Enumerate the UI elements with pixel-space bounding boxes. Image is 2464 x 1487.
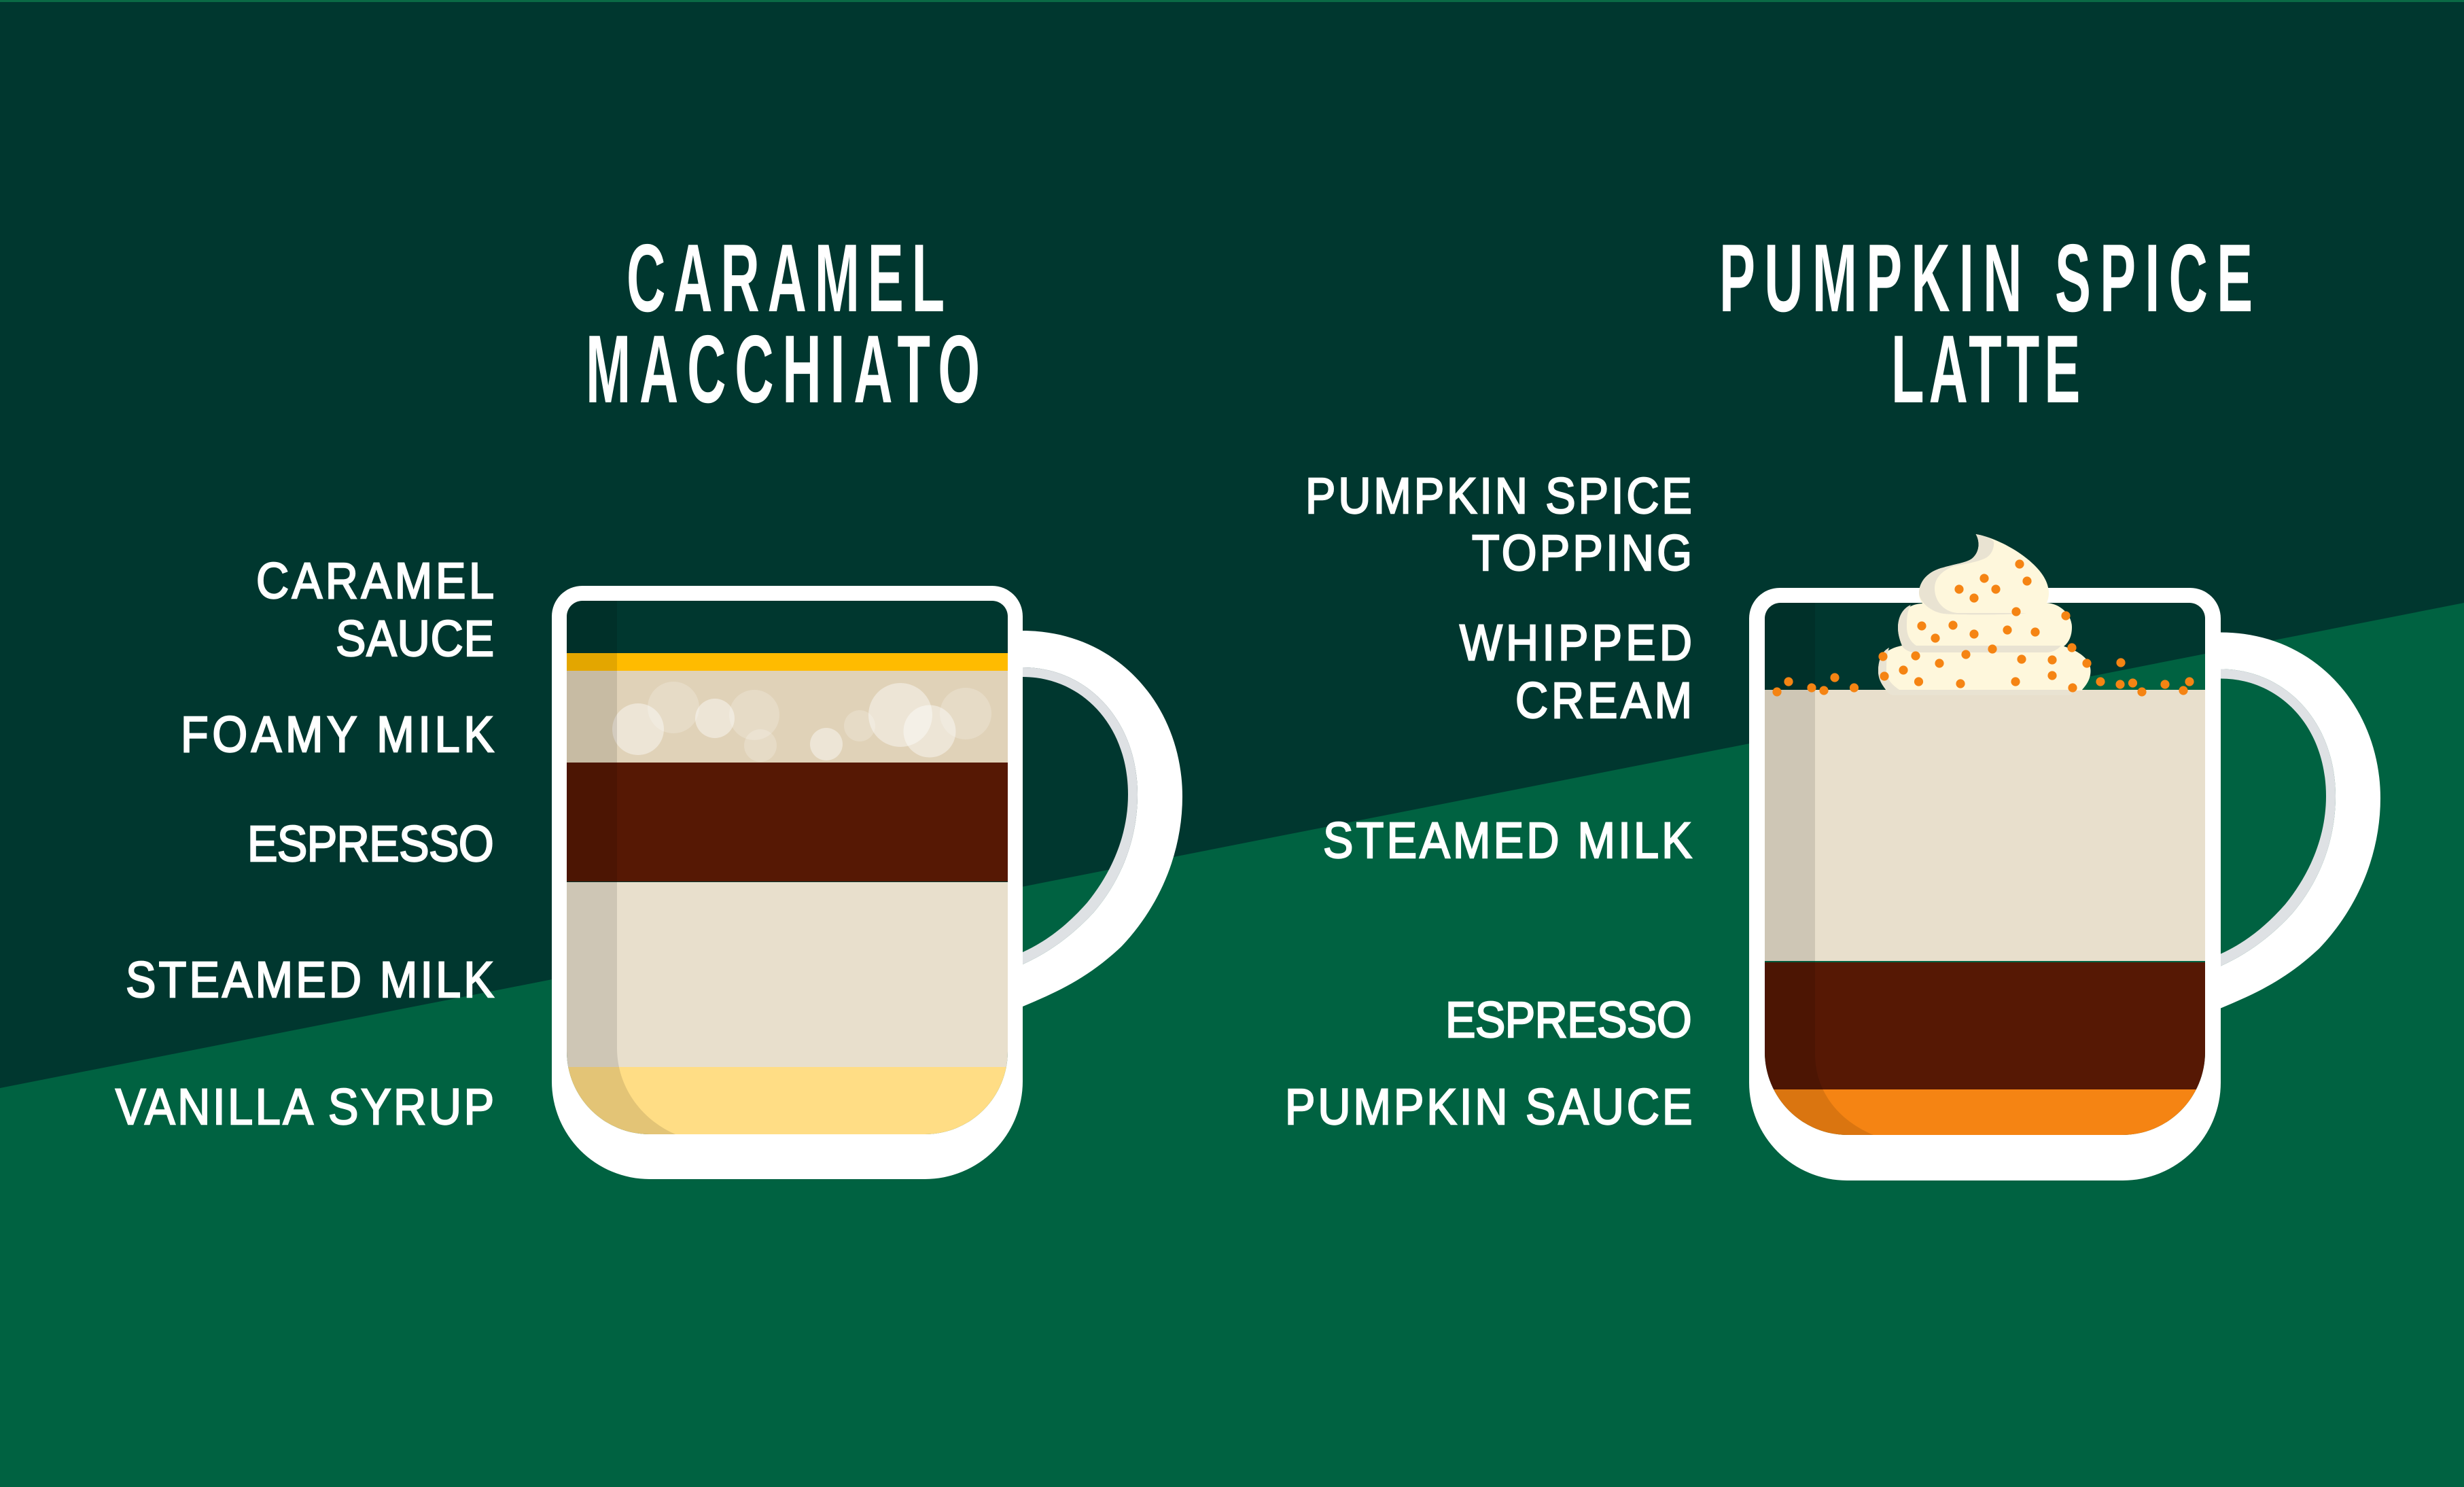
label: whipped cream: WHIPPED: [1460, 614, 1692, 671]
layer: caramel sauce: [567, 653, 1008, 671]
label: steamed milk: STEAMED MILK: [126, 951, 494, 1008]
label: pumpkin spice topping: PUMPKIN SPICE: [1305, 468, 1692, 524]
title: Pumpkin Spice Latte: [1719, 225, 2253, 423]
drink layers: [1765, 603, 2205, 1136]
layer: steamed milk: [567, 882, 1008, 1067]
label: pumpkin sauce: PUMPKIN SAUCE: [1285, 1079, 1692, 1135]
title: Caramel Macchiato: MACCHIATO: [586, 316, 980, 423]
glass shadow: [1765, 603, 1873, 1135]
layer: vanilla syrup: [567, 1067, 1008, 1135]
label: caramel sauce: SAUCE: [336, 610, 494, 667]
pumpkin spice topping sprinkles: [1772, 559, 2194, 697]
layer: espresso: [1765, 962, 2205, 1089]
layer: pumpkin sauce: [1765, 1089, 2205, 1136]
title: Caramel Macchiato: CARAMEL: [627, 225, 945, 332]
layer: espresso: [567, 763, 1008, 881]
mug handle: [1019, 631, 1182, 1007]
label: pumpkin spice topping: [1305, 468, 1692, 581]
layer: steamed milk: [1765, 690, 2205, 961]
mug body: glass outline: [552, 586, 1023, 1179]
mug: caramel macchiato: [552, 586, 1182, 1179]
mug body: glass outline: [1749, 588, 2221, 1180]
glass shadow: [567, 601, 675, 1134]
label: caramel sauce: [256, 553, 494, 667]
label: espresso: ESPRESSO: [1445, 992, 1692, 1048]
label: steamed milk: STEAMED MILK: [1323, 812, 1692, 869]
label: whipped cream: CREAM: [1515, 672, 1692, 729]
drink layers: [567, 601, 1008, 1135]
label: foamy milk: FOAMY MILK: [181, 706, 494, 763]
label: espresso: ESPRESSO: [247, 816, 494, 872]
label: whipped cream: [1460, 614, 1692, 729]
label: caramel sauce: CARAMEL: [256, 553, 494, 609]
title: Pumpkin Spice Latte: PUMPKIN SPICE: [1719, 225, 2253, 332]
layer: foamy milk: [567, 671, 1008, 763]
label: pumpkin spice topping: TOPPING: [1472, 525, 1692, 581]
mug: pumpkin spice latte: [1749, 588, 2380, 1180]
whipped cream: [1878, 534, 2090, 695]
title: Caramel Macchiato: [586, 225, 980, 423]
title: Pumpkin Spice Latte: LATTE: [1891, 316, 2080, 423]
label: vanilla syrup: VANILLA SYRUP: [116, 1079, 494, 1135]
mug handle: [2217, 632, 2380, 1009]
